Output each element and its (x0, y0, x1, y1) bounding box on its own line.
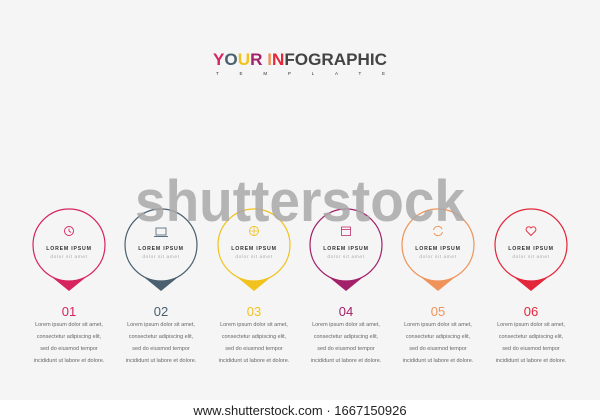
step 3: 03 (247, 304, 261, 319)
step 1: sed do eiusmod tempor (40, 346, 98, 352)
step 5: LOREM IPSUM (415, 246, 461, 252)
step 5: sed do eiusmod tempor (409, 346, 467, 352)
step 2: consectetur adipiscing elit, (129, 334, 194, 340)
watermark: shutterstock (135, 169, 466, 234)
step 5: 05 (431, 304, 445, 319)
step 5: Lorem ipsum dolor sit amet, (404, 322, 472, 328)
subtitle: TEMPLATE (216, 71, 385, 76)
step 3: Lorem ipsum dolor sit amet, (220, 322, 288, 328)
step 6: consectetur adipiscing elit, (499, 334, 564, 340)
step 1: consectetur adipiscing elit, (37, 334, 102, 340)
step 1: LOREM IPSUM (46, 246, 92, 252)
step 4 (310, 209, 382, 364)
step 2: Lorem ipsum dolor sit amet, (127, 322, 195, 328)
step 3: incididunt ut labore et dolore. (219, 358, 290, 364)
step 5: incididunt ut labore et dolore. (403, 358, 474, 364)
footer bar (0, 400, 600, 420)
step 4: Lorem ipsum dolor sit amet, (312, 322, 380, 328)
step 4: LOREM IPSUM (323, 246, 369, 252)
step 5 (402, 209, 474, 364)
step 6: LOREM IPSUM (508, 246, 554, 252)
step 3: dolor sit amet (235, 254, 273, 260)
step 5: dolor sit amet (419, 254, 457, 260)
step 2: sed do eiusmod tempor (132, 346, 190, 352)
step 5: consectetur adipiscing elit, (406, 334, 471, 340)
step 1: dolor sit amet (50, 254, 88, 260)
step 3: consectetur adipiscing elit, (222, 334, 287, 340)
footer bar: www.shutterstock.com · 1667150926 (192, 403, 407, 418)
step 1: Lorem ipsum dolor sit amet, (35, 322, 103, 328)
title: YOUR INFOGRAPHIC (213, 50, 387, 69)
step 2 (125, 209, 197, 364)
step 4: incididunt ut labore et dolore. (311, 358, 382, 364)
step 2: LOREM IPSUM (138, 246, 184, 252)
step 4: consectetur adipiscing elit, (314, 334, 379, 340)
step 1 (33, 209, 105, 364)
step 4: dolor sit amet (327, 254, 365, 260)
step 3: LOREM IPSUM (231, 246, 277, 252)
step 6: incididunt ut labore et dolore. (496, 358, 567, 364)
step 2: incididunt ut labore et dolore. (126, 358, 197, 364)
step 3 (218, 209, 290, 364)
step 4: sed do eiusmod tempor (317, 346, 375, 352)
step 1: 01 (62, 304, 76, 319)
step 6: Lorem ipsum dolor sit amet, (497, 322, 565, 328)
step 6: 06 (524, 304, 538, 319)
step 2: 02 (154, 304, 168, 319)
step 6 (495, 209, 567, 364)
step 2: dolor sit amet (142, 254, 180, 260)
step 4: 04 (339, 304, 353, 319)
step 1: incididunt ut labore et dolore. (34, 358, 105, 364)
step 3: sed do eiusmod tempor (225, 346, 283, 352)
step 6: sed do eiusmod tempor (502, 346, 560, 352)
step 6: dolor sit amet (512, 254, 550, 260)
